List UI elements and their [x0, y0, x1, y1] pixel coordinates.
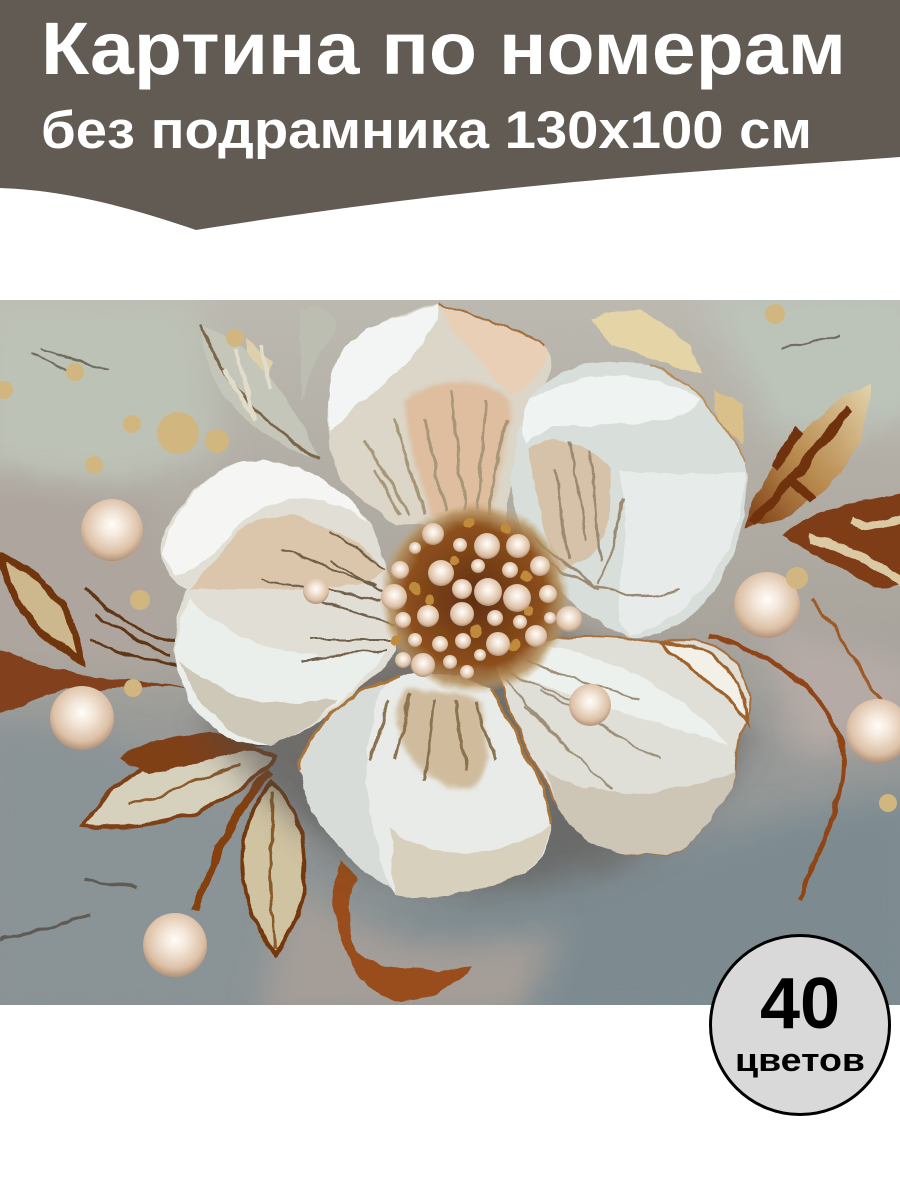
header banner	[0, 0, 900, 230]
badge label: цветов	[735, 1042, 865, 1078]
petal: right top	[510, 362, 748, 638]
lower-left leaves	[0, 733, 472, 1002]
right copper leaves	[710, 382, 900, 900]
pearls	[50, 499, 900, 977]
stamen pearls	[381, 523, 582, 679]
upper-left pale leaf	[199, 324, 324, 460]
petal: top	[328, 302, 551, 525]
petal: bottom	[300, 673, 553, 898]
painting background	[0, 280, 900, 1025]
badge number: 40	[760, 964, 840, 1044]
badge: 40 colours	[710, 936, 890, 1114]
title: Картина по номерам	[41, 7, 846, 90]
gold droplets	[0, 304, 897, 812]
left copper leaves	[0, 555, 190, 720]
petal: right bottom	[495, 637, 750, 855]
subtitle: без подрамника 130х100 см	[41, 101, 812, 160]
painting: flower with pearls	[0, 280, 900, 1025]
petal: left	[162, 460, 396, 745]
flower centre stamens	[379, 502, 571, 694]
soft shadow under flower	[200, 600, 750, 891]
